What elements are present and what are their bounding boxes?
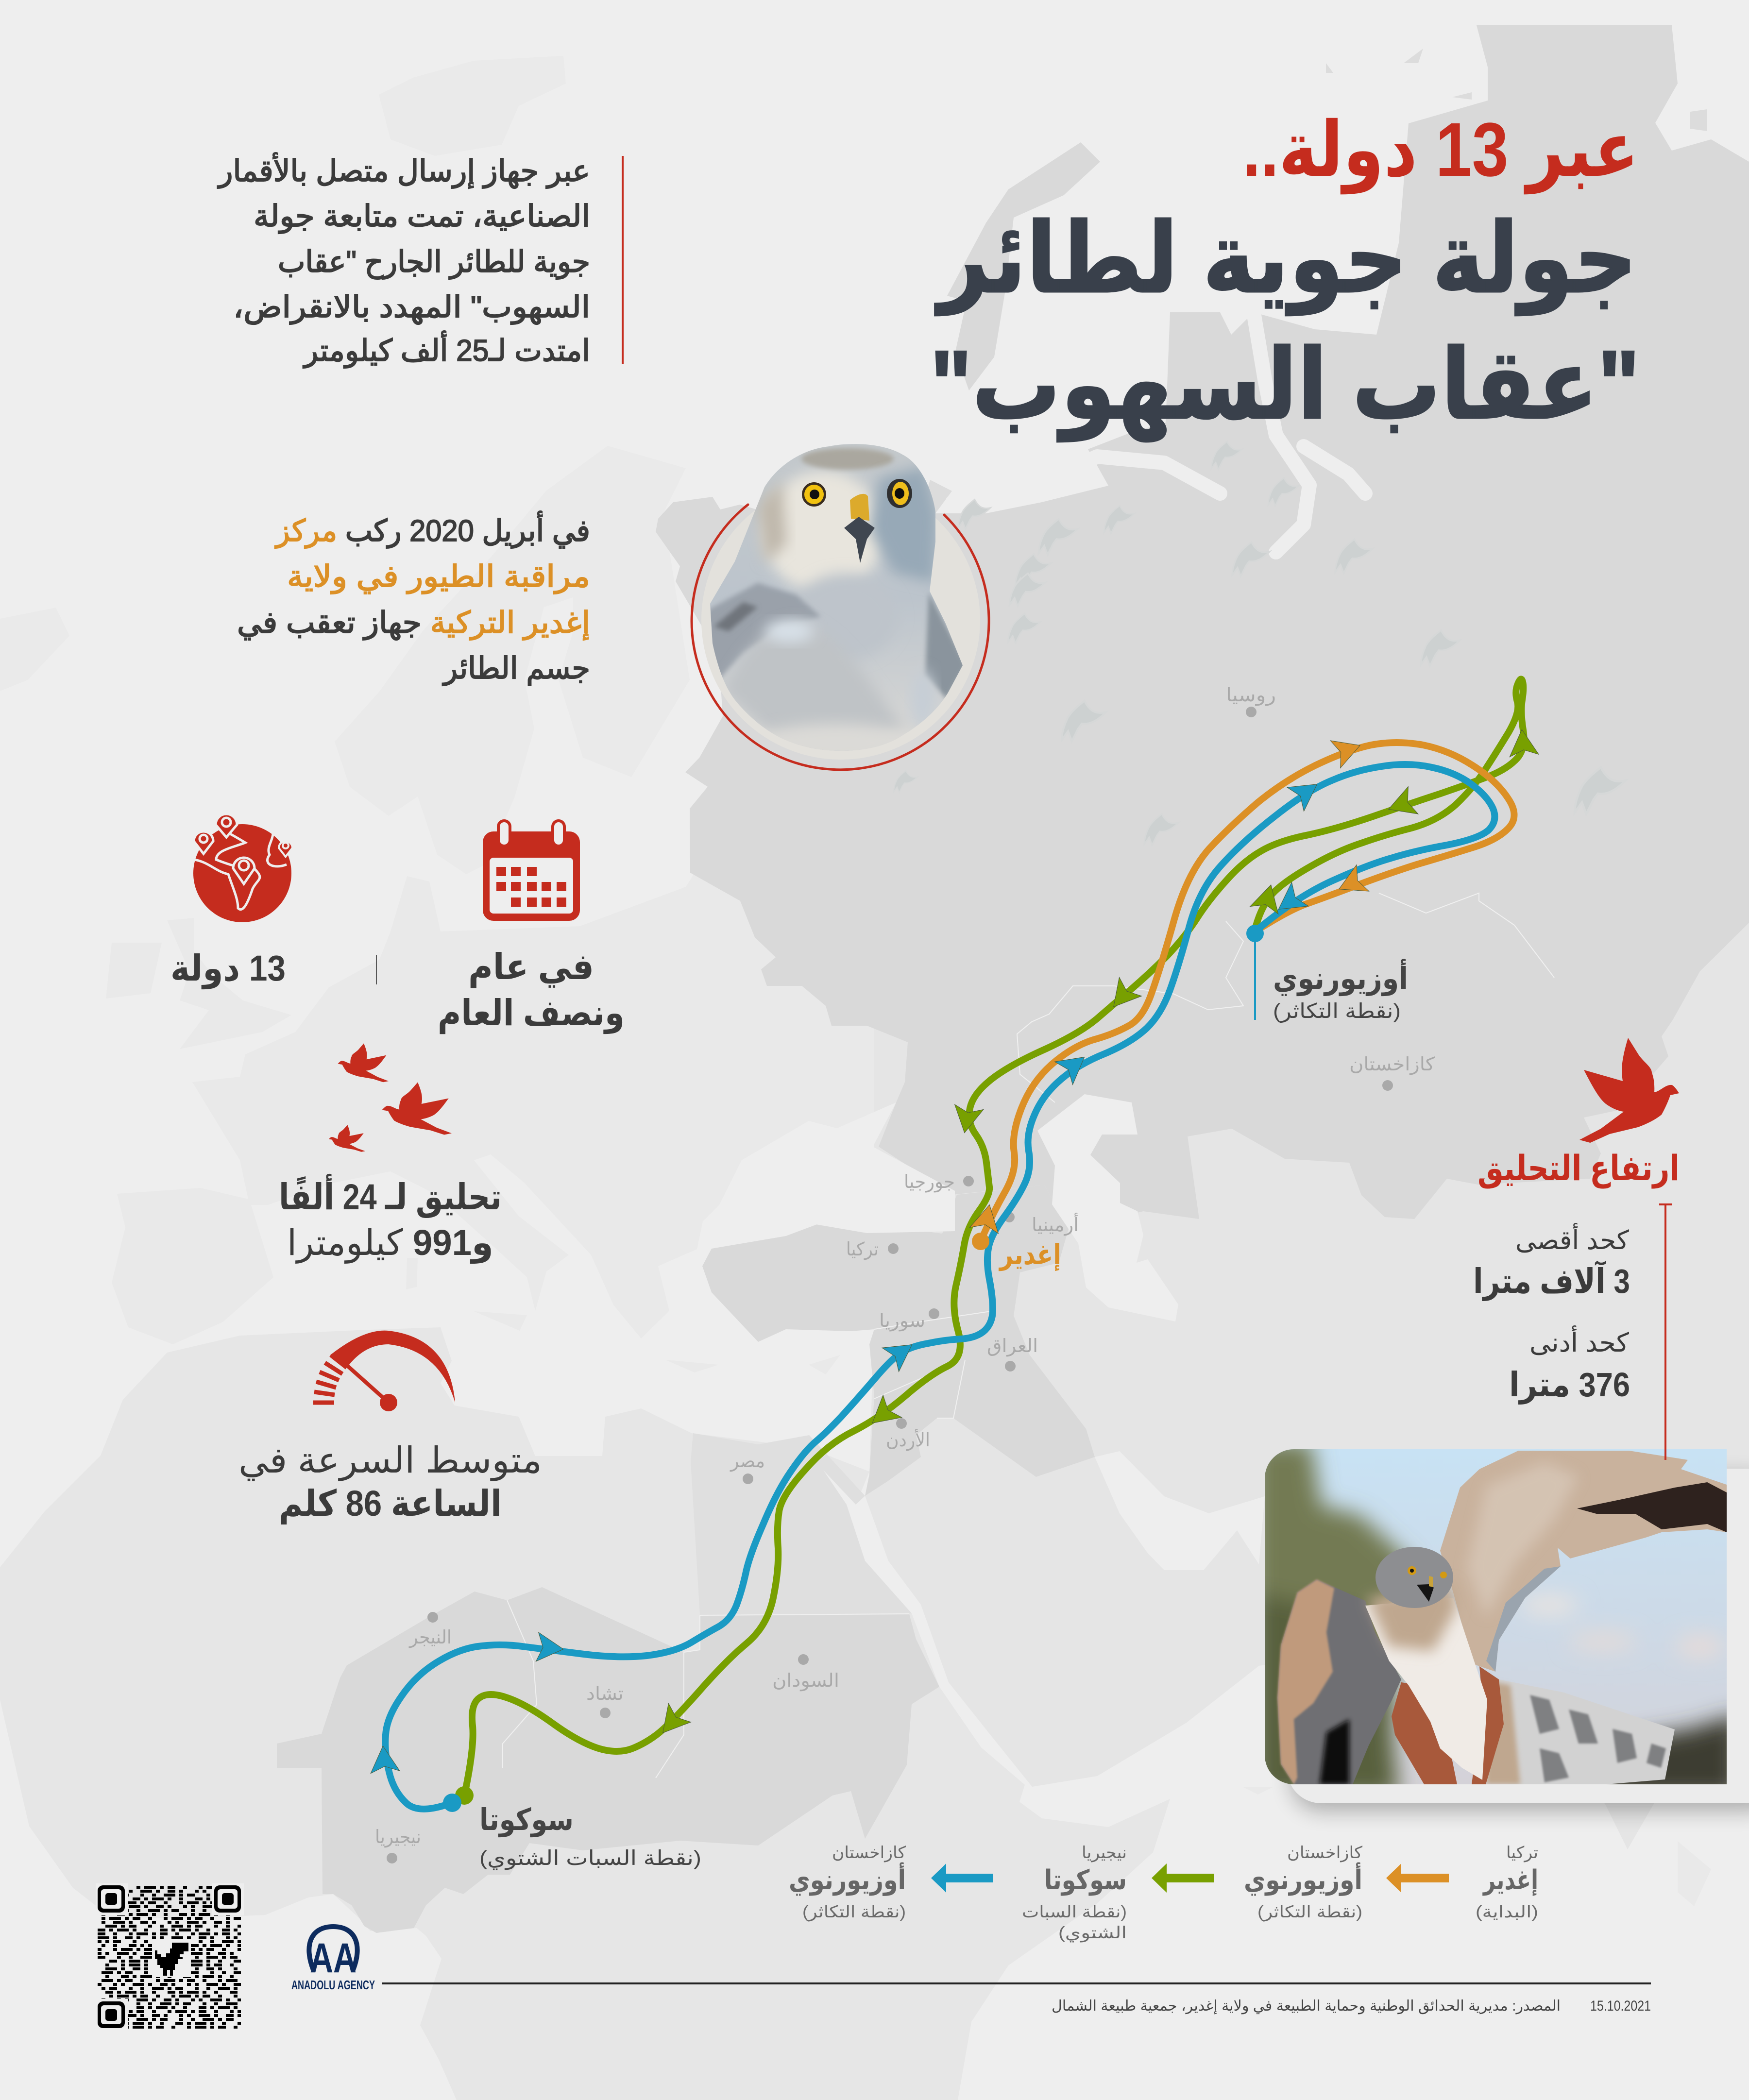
altitude minimum <box>1509 1325 1630 1405</box>
country labels on map: تركيا <box>846 1239 879 1260</box>
QR code <box>96 1883 244 2031</box>
arrow: orange <box>1386 1863 1449 1893</box>
legend: Sokoto wintering: نيجيريا <box>1082 1844 1127 1863</box>
legend: Igdir start: إغدير <box>1482 1864 1538 1896</box>
map: Russia and Kazakhstan <box>656 25 1749 1229</box>
legend: Sokoto wintering: الشتوي) <box>1058 1924 1127 1943</box>
legend: Ozernoye breeding: (نقطة التكاثر) <box>1257 1903 1362 1922</box>
country labels on map: مصر <box>730 1451 765 1472</box>
photo: head <box>1375 1547 1453 1608</box>
photo: tail <box>1495 1679 1675 1784</box>
country labels on map: تشاد <box>586 1684 624 1704</box>
country labels on map: سوريا <box>879 1311 925 1332</box>
title line 2: جولة جوية لطائر <box>934 204 1637 316</box>
stat: average speed <box>238 1440 542 1524</box>
altitude minimum: كحد أدنى <box>1529 1325 1629 1357</box>
stat: average speed: متوسط السرعة في <box>238 1440 542 1481</box>
altitude indicator line <box>1659 1203 1672 1460</box>
intro text block <box>217 152 624 368</box>
photo card shadow <box>1287 1469 1749 1811</box>
country labels on map: روسيا <box>1226 685 1276 706</box>
stat: average speed: الساعة 86 كلم <box>279 1483 502 1524</box>
country labels on map: كازاخستان <box>1349 1054 1435 1075</box>
legend: Ozernoye return <box>789 1844 906 1922</box>
legend: Igdir start: تركيا <box>1506 1844 1538 1863</box>
map: Sahel band Niger Chad Sudan Nigeria <box>277 1587 939 1933</box>
map: British Isles <box>106 918 291 1049</box>
device text block: في أبريل 2020 ركب مركز <box>274 511 590 548</box>
stat: countries: 13 دولة <box>170 948 286 990</box>
Anadolu Agency logo: ANADOLU AGENCY <box>291 1978 375 1992</box>
icon: flock of red birds <box>329 1043 452 1152</box>
source note: المصدر: مديرية الحدائق الوطنية وحماية الطبيعة في ولاية إغدير، جمعية طبيعة الشمال <box>1052 1998 1561 2015</box>
legend: Sokoto wintering: سوكوتا <box>1044 1864 1127 1896</box>
place label: Ozernoye: (نقطة التكاثر) <box>1273 999 1401 1023</box>
route arrowheads <box>368 728 1539 1774</box>
ghost birds over the map <box>894 441 1626 845</box>
map: islands <box>406 1258 1711 1906</box>
map: Novaya Zemlya <box>947 142 1100 390</box>
device text block: جسم الطائر <box>442 652 590 686</box>
portrait beak <box>844 494 875 563</box>
place label: Ozernoye <box>1273 959 1408 1023</box>
country labels on map: نيجيريا <box>375 1827 421 1848</box>
route: blue <box>385 764 1494 1809</box>
stat: distance: و991 كيلومترا <box>287 1222 493 1264</box>
map: Turkey Caucasus Syria Iraq Jordan <box>702 1185 1095 1496</box>
photo: body <box>1365 1598 1487 1780</box>
intro text block: جوية للطائر الجارح "عقاب <box>278 245 590 279</box>
legend: Sokoto wintering <box>1022 1844 1127 1943</box>
stat: duration: في عام <box>468 947 594 988</box>
legend: Ozernoye breeding <box>1244 1844 1363 1922</box>
intro text block: الصناعية، تمت متابعة جولة <box>254 200 590 234</box>
photo: harrier held by hand <box>1265 1449 1727 1784</box>
icon: speedometer <box>313 1331 455 1411</box>
country labels on map: الأردن <box>886 1428 930 1451</box>
legend: Ozernoye return: كازاخستان <box>832 1844 906 1862</box>
intro text block: السهوب" المهدد بالانقراض، <box>233 290 590 325</box>
place label: Sokoto <box>479 1803 701 1870</box>
map: inland seas <box>719 1094 1265 1570</box>
route legend <box>789 1844 1538 1943</box>
legend: Ozernoye return: أوزيورنوي <box>789 1862 906 1896</box>
portrait eyes <box>802 479 912 508</box>
route endpoint dots <box>443 925 1264 1812</box>
map: Europe <box>112 826 874 1344</box>
route: green <box>464 679 1524 1795</box>
map: arctic islands <box>923 49 1707 513</box>
legend: Igdir start: (البداية) <box>1476 1903 1538 1921</box>
flight altitude panel <box>1473 1038 1680 1405</box>
legend: Igdir start <box>1476 1844 1538 1921</box>
title line 3: "عقاب السهوب" <box>930 331 1640 442</box>
footer <box>382 1982 1651 2015</box>
photo: hand <box>1392 1666 1504 1784</box>
device text block: إغدير التركية جهاز تعقب في <box>237 606 590 641</box>
intro text block: عبر جهاز إرسال متصل بالأقمار <box>217 152 590 189</box>
altitude maximum <box>1473 1223 1630 1301</box>
migration routes <box>385 679 1524 1809</box>
arrow: blue <box>931 1863 993 1893</box>
icon: calendar <box>483 821 580 921</box>
legend: Ozernoye return: (نقطة التكاثر) <box>802 1903 906 1922</box>
country labels on map: العراق <box>987 1336 1038 1357</box>
map: Asia and Arabia <box>865 874 1749 1849</box>
arrow: green <box>1152 1863 1214 1893</box>
map: Egypt <box>691 1433 912 1615</box>
map: country borders <box>503 893 1554 1778</box>
altitude maximum: كحد أقصى <box>1515 1223 1629 1255</box>
intro text block: امتدت لـ25 ألف كيلومتر <box>303 331 590 368</box>
photo: right wing <box>1440 1451 1727 1672</box>
title line 1: عبر 13 دولة.. <box>1242 107 1639 195</box>
Anadolu Agency logo: AA <box>310 1935 357 1981</box>
place label: Igdir: إغدير <box>998 1239 1061 1271</box>
place label: Ozernoye: أوزيورنوي <box>1273 959 1408 996</box>
photo: left wing <box>1277 1579 1401 1784</box>
altitude maximum: 3 آلاف مترا <box>1473 1260 1630 1301</box>
stat: duration <box>438 947 625 1034</box>
stat: duration: ونصف العام <box>438 993 625 1034</box>
icon: dinosaur in QR <box>155 1943 188 1976</box>
legend: Sokoto wintering: (نقطة السبات <box>1022 1903 1127 1921</box>
Anadolu Agency logo <box>291 1927 375 1992</box>
stat: distance <box>279 1173 502 1264</box>
map: Scandinavia <box>335 446 690 874</box>
place label: Sokoto: (نقطة السبات الشتوي) <box>479 1846 701 1870</box>
icon: globe with pins <box>193 814 292 922</box>
photo: trees <box>1265 1449 1727 1784</box>
country labels on map: النيجر <box>408 1627 452 1648</box>
map: Iceland and Svalbard <box>0 56 566 691</box>
photo: harrier portrait in red ring <box>692 444 989 770</box>
icon: red bird <box>1579 1038 1679 1143</box>
route: orange <box>981 743 1514 1241</box>
map: Africa <box>0 1327 1170 2100</box>
altitude heading: ارتفاع التحليق <box>1477 1149 1680 1189</box>
map: north coast inlets <box>952 312 1365 552</box>
legend: Ozernoye breeding: أوزيورنوي <box>1244 1862 1362 1896</box>
place label: Sokoto: سوكوتا <box>479 1803 574 1837</box>
date: 15.10.2021 <box>1590 1998 1651 2014</box>
country labels on map: السودان <box>772 1671 839 1692</box>
stat: distance: تحليق لـ 24 ألفًا <box>279 1173 502 1218</box>
altitude minimum: 376 مترا <box>1509 1366 1630 1405</box>
country labels on map: جورجيا <box>904 1172 955 1193</box>
stat icons row <box>170 814 625 1034</box>
device text block: مراقبة الطيور في ولاية <box>287 560 590 594</box>
country labels on map <box>375 685 1435 1863</box>
legend: Ozernoye breeding: كازاخستان <box>1287 1844 1363 1862</box>
device text block <box>237 511 590 686</box>
title <box>930 107 1640 442</box>
country labels on map: أرمينيا <box>1032 1213 1079 1236</box>
